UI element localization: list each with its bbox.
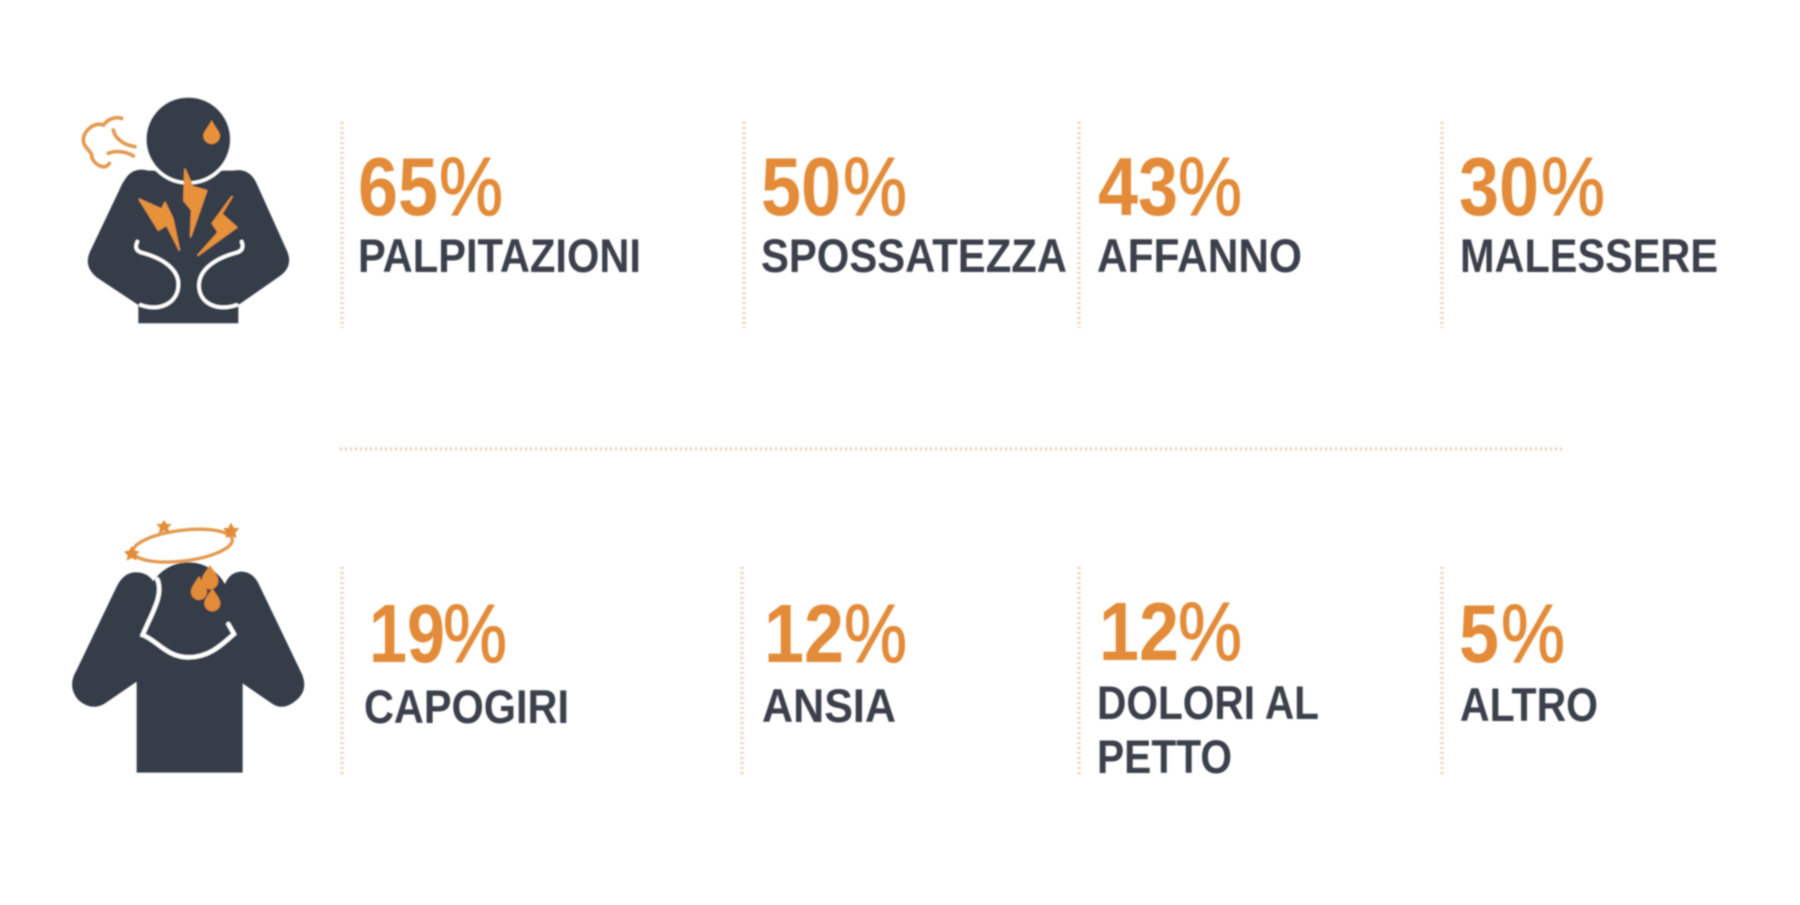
stat: 12% ansia: 12 <box>764 587 844 680</box>
divider <box>742 122 746 328</box>
stat: 50% spossatezza <box>761 140 1067 282</box>
stat: 19% capogiri: CAPOGIRI <box>364 680 569 733</box>
stat: 19% capogiri: % <box>443 587 507 680</box>
stat: 12% dolori al petto: PETTO <box>1097 730 1232 783</box>
stat: 30% malessere <box>1459 140 1718 282</box>
stat: 50% spossatezza: SPOSSATEZZA <box>761 229 1067 282</box>
stat: 5% altro: ALTRO <box>1460 678 1598 731</box>
stat: 50% spossatezza: % <box>843 140 907 233</box>
divider <box>740 567 744 775</box>
stat: 43% affanno <box>1097 140 1302 282</box>
stat: 30% malessere: 30 <box>1459 140 1539 233</box>
stat: 12% dolori al petto <box>1097 585 1319 783</box>
divider <box>340 122 344 328</box>
stat: 12% ansia: ANSIA <box>762 679 896 732</box>
stat: 65% palpitazioni <box>358 140 641 282</box>
stat: 30% malessere: % <box>1541 140 1605 233</box>
stat: 43% affanno: % <box>1178 140 1242 233</box>
stat: 12% ansia: % <box>844 587 907 680</box>
stat: 19% capogiri: 19 <box>369 587 445 680</box>
stat: 65% palpitazioni: 65 <box>358 140 438 233</box>
divider <box>1077 122 1081 328</box>
stat: 65% palpitazioni: PALPITAZIONI <box>358 229 641 282</box>
panel: row 1 symptoms <box>83 94 1718 328</box>
divider <box>1440 567 1444 775</box>
stat: 12% dolori al petto: 12 <box>1099 585 1179 678</box>
stat: 12% dolori al petto: % <box>1178 585 1242 678</box>
stat: 5% altro: % <box>1501 587 1565 680</box>
stat: 12% ansia <box>762 587 907 732</box>
stat: 5% altro <box>1459 587 1598 731</box>
divider <box>1440 122 1444 328</box>
icon: person with palpitations <box>83 94 289 323</box>
stat: 12% dolori al petto: DOLORI AL <box>1097 676 1319 729</box>
icon: person with dizziness <box>72 520 304 773</box>
stat: 19% capogiri <box>364 587 569 733</box>
stat: 65% palpitazioni: % <box>439 140 503 233</box>
stat: 43% affanno: 43 <box>1098 140 1178 233</box>
divider <box>1077 567 1081 775</box>
stat: 30% malessere: MALESSERE <box>1460 229 1718 282</box>
divider <box>340 567 344 775</box>
panel: row 2 symptoms <box>72 520 1598 783</box>
stat: 5% altro: 5 <box>1459 587 1499 680</box>
stat: 43% affanno: AFFANNO <box>1097 229 1302 282</box>
horizontal dotted separator <box>340 447 1562 451</box>
stat: 50% spossatezza: 50 <box>761 140 841 233</box>
